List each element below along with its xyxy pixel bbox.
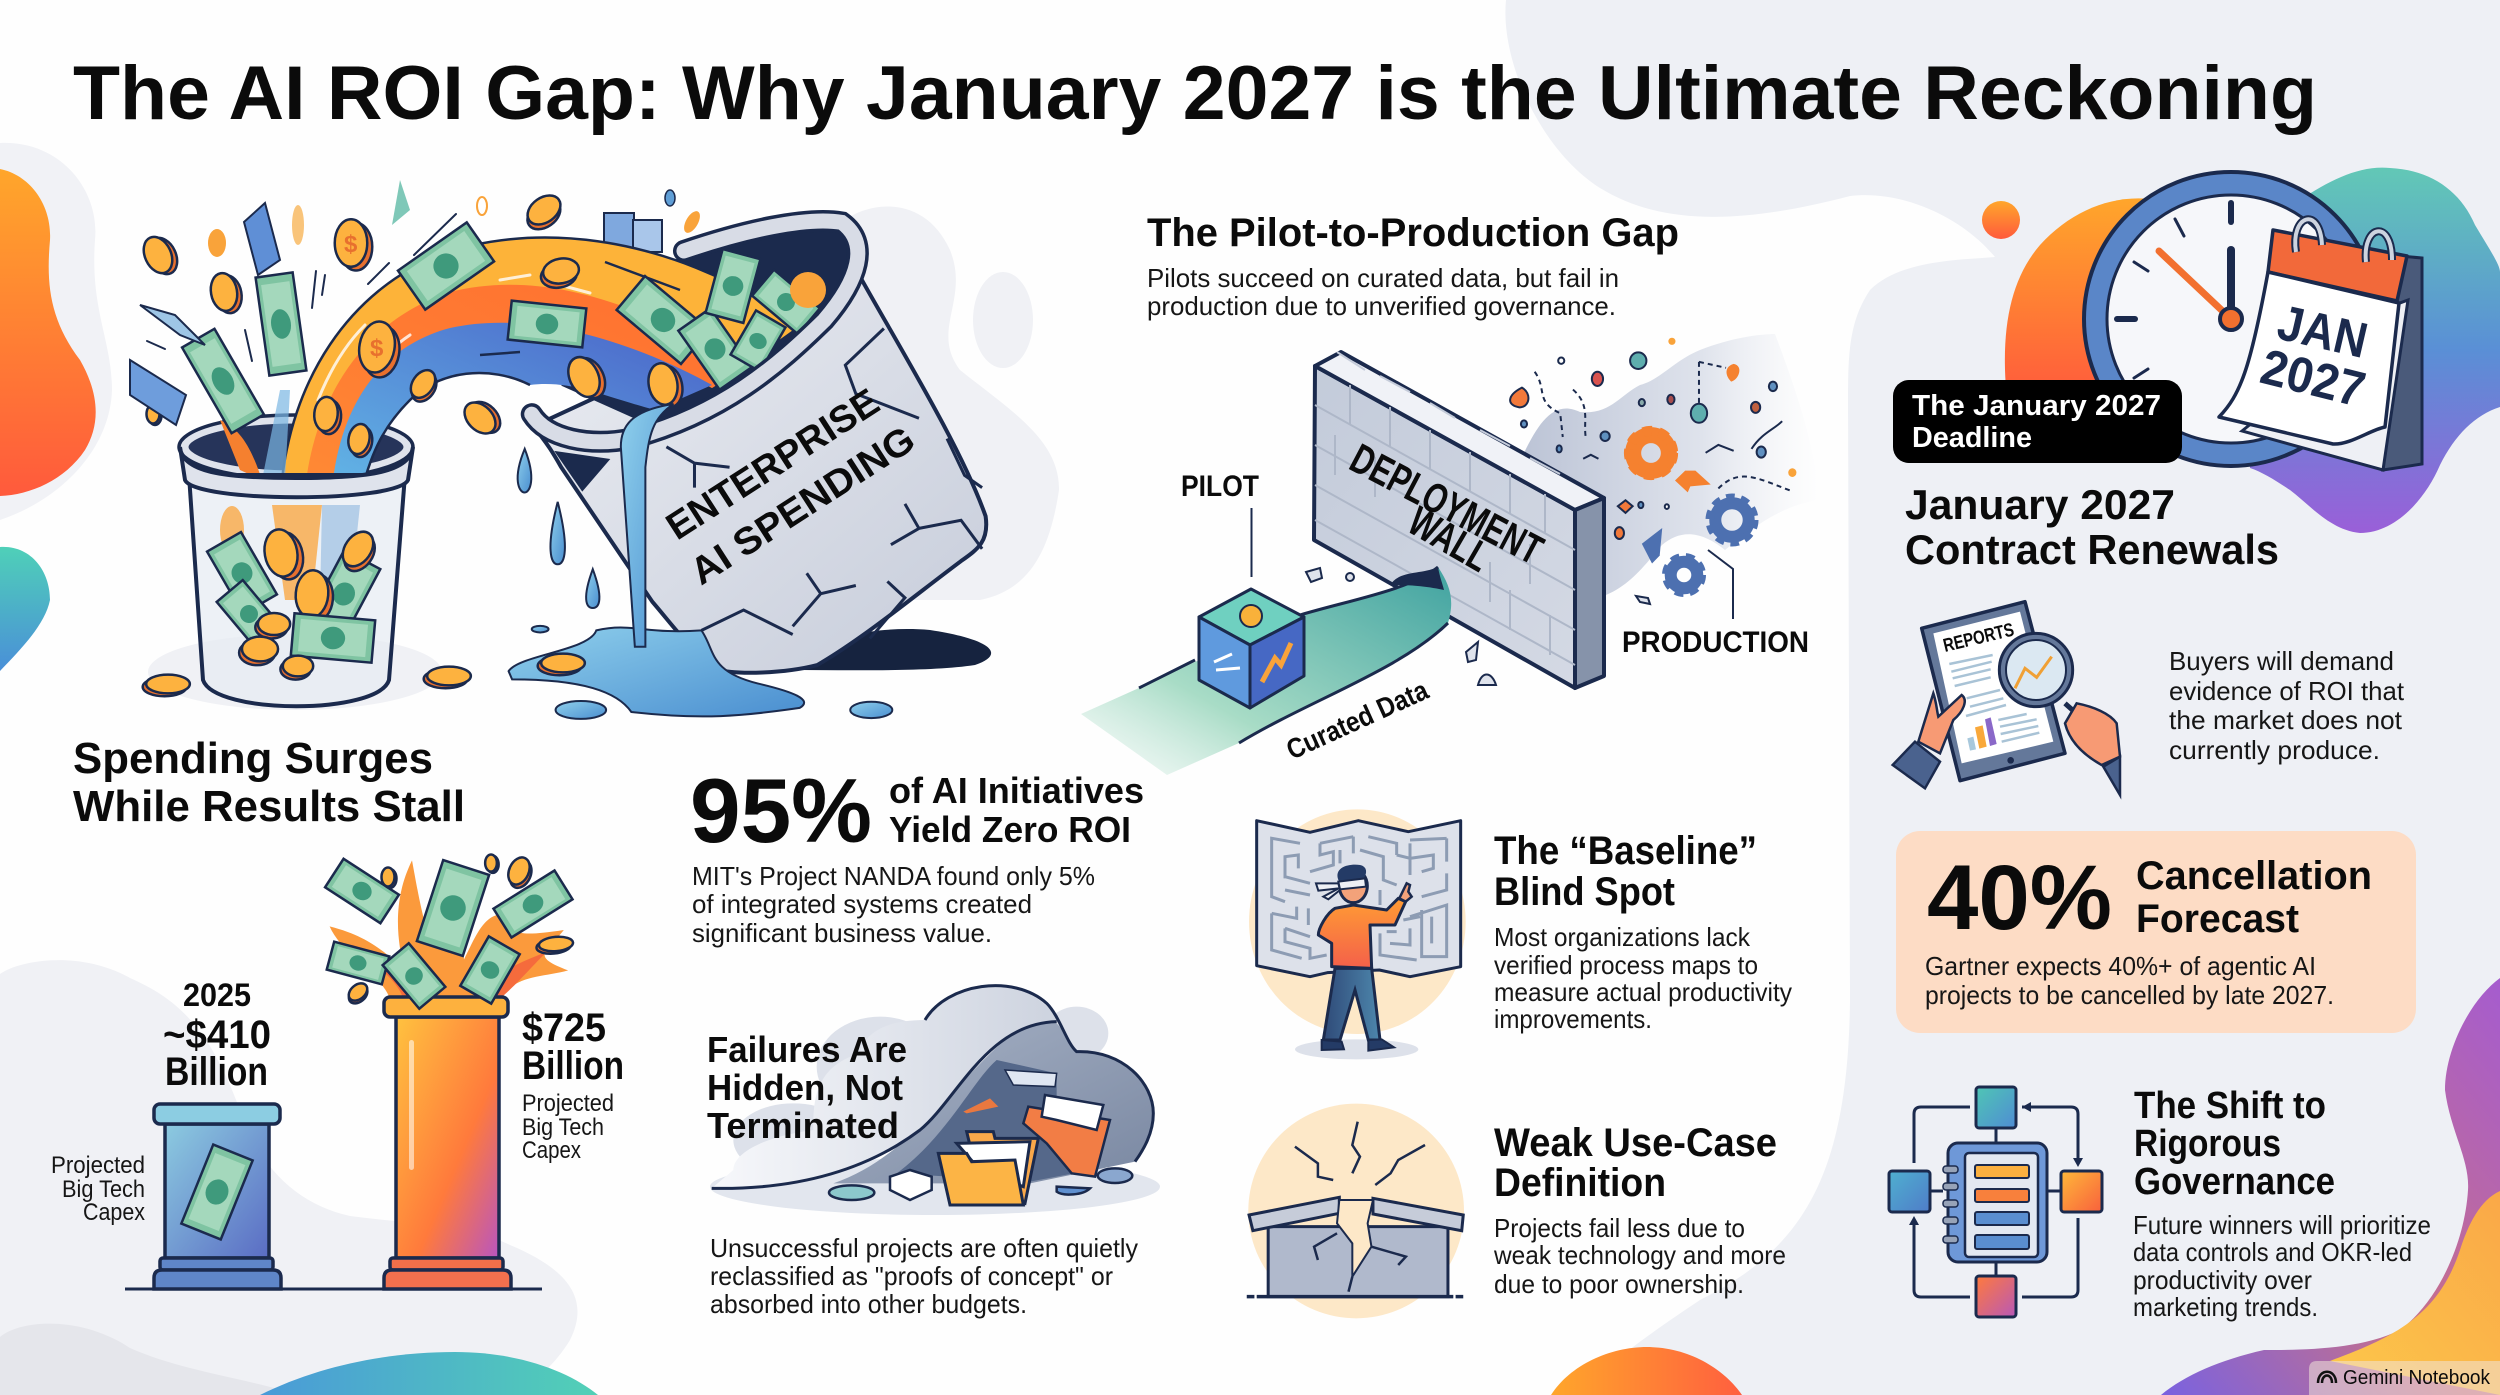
stat: 95 percent: significant business value.	[692, 918, 992, 948]
yellow folder	[938, 1132, 1038, 1205]
calendar back	[2383, 256, 2422, 470]
calendar text: 2027	[2255, 338, 2371, 418]
text: failures body: reclassified as "proofs of concept" or	[710, 1261, 1113, 1291]
orange pillar flames	[330, 860, 568, 1000]
calendar sheet	[2219, 272, 2399, 444]
stat: 95 percent: MIT's Project NANDA found only 5%	[692, 861, 1095, 891]
satellite squares	[1889, 1087, 2102, 1317]
blob: left teal	[0, 547, 50, 671]
card: 40 percent cancellation forecast: projects to be cancelled by late 2027.	[1925, 980, 2334, 1010]
water drips and puddle	[509, 404, 892, 719]
text: future winners: data controls and OKR-led	[2133, 1237, 2412, 1267]
text: baseline body: Most organizations lack	[1494, 922, 1751, 952]
stream edges	[1139, 567, 1448, 743]
purple teal blob	[2240, 168, 2500, 533]
label pilot: PILOT	[1181, 470, 1259, 503]
clipboard	[1948, 1143, 2047, 1262]
heading: baseline blind spot: The “Baseline”	[1494, 829, 1757, 873]
text: buyers demand: currently produce.	[2169, 735, 2380, 765]
text: future winners	[2133, 1210, 2431, 1322]
illustration: cloud hiding failed projects	[710, 984, 1160, 1215]
label 725: Billion	[522, 1044, 624, 1088]
label 2025	[163, 977, 271, 1094]
text: future winners: Future winners will prioritize	[2133, 1210, 2431, 1240]
bucket label: AI SPENDING	[683, 419, 923, 594]
calendar rings highlight	[2295, 219, 2392, 262]
text: failures body: Unsuccessful projects are often quietly	[710, 1233, 1138, 1263]
text: buyers demand: evidence of ROI that	[2169, 676, 2405, 706]
floating bills	[182, 222, 820, 433]
text: weak use-case body: Projects fail less due to	[1494, 1213, 1745, 1243]
heading: contract renewals: January 2027	[1905, 481, 2175, 528]
coin dollar signs: $	[370, 335, 384, 362]
text: weak use-case body: weak technology and more	[1493, 1240, 1786, 1270]
cup stream	[220, 505, 360, 600]
stream outlines	[281, 238, 800, 490]
card: 40 percent cancellation forecast: 40%	[1927, 847, 2112, 949]
clipboard sheet	[1965, 1153, 2038, 1257]
coin dollar signs: $	[344, 231, 358, 258]
text: buyers demand	[2169, 646, 2405, 765]
illustration: cracked foundation	[1247, 1104, 1464, 1318]
splash streaks	[147, 214, 456, 361]
wall hole	[1390, 567, 1444, 590]
blob: left orange	[0, 169, 96, 496]
cup back rim	[184, 419, 408, 475]
wall bricks	[1315, 352, 1575, 665]
text: failures body: absorbed into other budgets.	[710, 1289, 1027, 1319]
left splash fill	[220, 390, 290, 480]
label projected left: Capex	[83, 1199, 145, 1226]
heading: contract renewals	[1905, 481, 2279, 573]
wall label: DEPLOYMENT	[1343, 434, 1551, 574]
bucket label: ENTERPRISE	[659, 381, 887, 549]
wall rubble	[1306, 568, 1650, 685]
card: 40 percent cancellation forecast: Forecast	[2136, 897, 2299, 941]
heading: failures hidden	[707, 1029, 907, 1146]
stream highlights	[318, 275, 590, 400]
badge: january deadline	[1893, 380, 2182, 463]
card: 40 percent cancellation forecast: Gartner expects 40%+ of agentic AI	[1925, 951, 2316, 981]
background: left halo	[0, 143, 112, 520]
heading: failures hidden: Failures Are	[707, 1029, 907, 1070]
chart: capex pillars	[51, 854, 624, 1289]
burst bills	[325, 859, 573, 1009]
orange pillar	[384, 997, 511, 1289]
heading: shift to governance: Rigorous	[2134, 1123, 2281, 1165]
cup rim	[180, 447, 413, 497]
label 2025: ~$410	[163, 1013, 271, 1057]
calendar rings	[2295, 219, 2392, 262]
text: buyers demand: Buyers will demand	[2169, 646, 2394, 676]
clock face	[2084, 172, 2378, 466]
text: baseline body: measure actual productivity	[1494, 977, 1792, 1007]
badge: january deadline: Deadline	[1912, 422, 2032, 454]
heading: contract renewals: Contract Renewals	[1905, 526, 2279, 573]
calendar pages	[2242, 300, 2408, 470]
label projected left: Projected	[51, 1152, 145, 1179]
debris cloud	[1524, 334, 1820, 595]
calendar text	[2255, 294, 2373, 418]
blue papers	[604, 213, 662, 252]
blue pillar bill	[181, 1145, 253, 1239]
debris icons	[1510, 338, 1796, 564]
calendar text: JAN	[2273, 294, 2373, 369]
heading: weak use-case: Weak Use-Case	[1494, 1121, 1777, 1165]
blob: bottom teal	[260, 1352, 598, 1395]
heading: failures hidden: Terminated	[707, 1105, 899, 1146]
label 2025: 2025	[183, 977, 251, 1013]
label 2025: Billion	[165, 1050, 268, 1094]
coin dollar signs	[344, 231, 384, 362]
background: left gray blob	[0, 960, 578, 1395]
floor coins	[143, 667, 471, 696]
pillar highlight	[409, 1040, 414, 1170]
stat: 95 percent	[690, 761, 1144, 948]
heading: pilot to production: The Pilot-to-Production Gap	[1147, 211, 1679, 255]
heading: failures hidden: Hidden, Not	[707, 1067, 903, 1108]
watermark: gemini notebook: Gemini Notebook	[2343, 1367, 2491, 1389]
cup back rim outline	[179, 415, 413, 479]
heading: shift to governance	[2134, 1085, 2335, 1203]
flowing stream outer band	[281, 238, 800, 490]
clipboard rings	[1943, 1166, 1958, 1243]
orange folder	[1023, 1095, 1110, 1177]
chips	[829, 1168, 1132, 1200]
clock ticks	[2117, 203, 2231, 378]
axis baseline	[125, 1288, 542, 1290]
stat: 95 percent: Yield Zero ROI	[889, 809, 1131, 850]
clock dial	[2107, 195, 2355, 443]
wall faces	[1314, 352, 1604, 688]
text: pilot description: production due to unverified governance.	[1147, 291, 1616, 321]
card: 40 percent cancellation forecast	[1896, 831, 2416, 1033]
stat: 95 percent: of integrated systems created	[692, 889, 1032, 919]
illustration: leaking bucket pouring money into a cup	[130, 180, 1059, 719]
flying coins	[138, 190, 686, 459]
calendar header	[2268, 230, 2407, 301]
label production: PRODUCTION	[1622, 626, 1809, 659]
wall label	[1343, 434, 1551, 581]
reports label: REPORTS	[1941, 620, 2016, 657]
flowing stream orange band	[305, 285, 745, 490]
background: right column panel	[1505, 0, 2500, 1395]
gears	[1629, 431, 1754, 592]
text: future winners: productivity over	[2133, 1265, 2312, 1295]
orange dot in bucket	[790, 272, 826, 308]
cup contents	[207, 526, 383, 680]
text: weak use-case body	[1493, 1213, 1786, 1299]
heading: shift to governance: Governance	[2134, 1161, 2335, 1203]
heading: spending surges: Spending Surges	[73, 734, 433, 783]
illustration: deployment wall	[1081, 334, 1820, 775]
arrow heads	[1909, 1102, 2083, 1225]
card: 40 percent cancellation forecast: Cancellation	[2136, 854, 2372, 898]
label projected right	[522, 1090, 614, 1164]
text: buyers demand: the market does not	[2169, 705, 2403, 735]
orange dot	[1982, 201, 2020, 239]
heading: baseline blind spot	[1494, 829, 1757, 914]
watermark: gemini notebook	[2309, 1361, 2500, 1395]
text: pilot description: Pilots succeed on curated data, but fail in	[1147, 263, 1619, 293]
blob: bottom right purple	[2161, 978, 2500, 1395]
curated data stream	[1081, 567, 1451, 775]
badge: january deadline: The January 2027	[1912, 390, 2161, 422]
bucket body	[533, 222, 986, 673]
pilot cube	[1199, 589, 1304, 708]
label projected left	[51, 1152, 145, 1226]
bucket rim	[532, 221, 858, 442]
text: baseline body	[1494, 922, 1792, 1034]
label curated data: Curated Data	[1282, 674, 1433, 765]
label projected right: Projected	[522, 1090, 614, 1117]
bucket label	[659, 381, 923, 594]
title: The AI ROI Gap: Why January 2027 is the Ultimate Reckoning	[73, 51, 2317, 136]
blue pillar 2025	[154, 1104, 281, 1289]
puddle coin	[538, 654, 585, 675]
label projected left: Big Tech	[62, 1176, 145, 1203]
pilot leader	[1250, 508, 1252, 577]
cube gear and chart	[1214, 605, 1291, 682]
burst coins	[344, 854, 574, 1007]
heading: spending surges: While Results Stall	[73, 782, 465, 831]
clock hands	[2159, 250, 2242, 330]
blob: bottom orange	[1551, 1347, 1742, 1395]
label 725	[522, 1006, 624, 1088]
production leader	[1708, 550, 1733, 619]
label 725: $725	[522, 1006, 606, 1050]
background: lower left dark blob	[0, 1324, 300, 1395]
heading: baseline blind spot: Blind Spot	[1494, 870, 1675, 914]
illustration: maze and blindfolded person	[1249, 809, 1466, 1059]
text: future winners: marketing trends.	[2133, 1292, 2318, 1322]
icon: governance cycle	[1889, 1087, 2102, 1317]
stat: 95 percent: 95%	[690, 761, 872, 862]
clipboard bars	[1975, 1165, 2029, 1249]
flowing stream blue band	[332, 323, 712, 490]
label projected right: Big Tech	[522, 1114, 604, 1141]
heading: shift to governance: The Shift to	[2134, 1085, 2326, 1127]
stat: 95 percent: of AI Initiatives	[889, 770, 1144, 811]
text: failures body	[710, 1233, 1138, 1319]
gray backdrop blobs	[148, 206, 1059, 710]
text: baseline body: improvements.	[1494, 1004, 1652, 1034]
confetti	[130, 180, 703, 425]
illustration: clock and calendar	[1982, 168, 2500, 533]
heading: weak use-case	[1494, 1121, 1777, 1205]
text: pilot description	[1147, 263, 1619, 321]
blob: bottom right yellow	[2330, 1191, 2500, 1395]
wall label: WALL	[1400, 497, 1498, 581]
heading: weak use-case: Definition	[1494, 1161, 1666, 1205]
text: weak use-case body: due to poor ownership.	[1494, 1269, 1744, 1299]
orange blob	[2005, 198, 2200, 400]
label projected right: Capex	[522, 1137, 581, 1164]
text: baseline body: verified process maps to	[1494, 950, 1758, 980]
bucket shadow	[780, 629, 991, 670]
heading: spending surges	[73, 734, 465, 831]
icon: tablet report with magnifier	[1893, 602, 2120, 795]
glass cup	[189, 475, 405, 706]
